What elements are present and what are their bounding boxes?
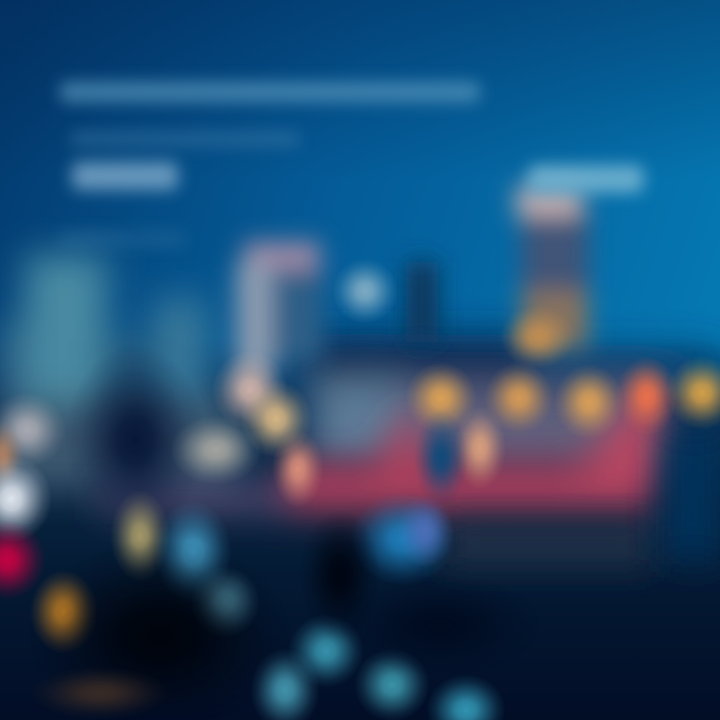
blurred skyline buildings (0, 255, 720, 490)
bokeh: teal 4 (429, 677, 503, 720)
lower dark area (0, 340, 720, 720)
bokeh: amber 4 (669, 358, 720, 428)
foreground shadow: right (386, 594, 493, 648)
tower base glow (502, 310, 572, 366)
bokeh: amber 1 (408, 364, 474, 429)
bokeh: amber 3 (556, 366, 620, 436)
bokeh: orange lower left (32, 572, 95, 651)
warm glow: grey building (174, 418, 258, 482)
tall right tower (516, 186, 588, 348)
bokeh: red left edge (0, 524, 44, 598)
bokeh: teal 1 (291, 618, 361, 685)
dark building shadow at left (76, 358, 193, 510)
bokeh: blue reflection (356, 496, 451, 582)
warm glow: yellow building (242, 382, 310, 456)
bokeh: grey teal (197, 570, 256, 632)
warm glow: bridge end (274, 433, 321, 504)
blue gap in bridge (416, 413, 466, 502)
bokeh: white left edge (0, 458, 50, 539)
dark tower (406, 262, 438, 342)
foreground shadow: left (46, 548, 256, 702)
bokeh: orange (618, 358, 676, 432)
label block (illegible text) (72, 162, 178, 190)
red bridge band (100, 395, 660, 512)
bokeh: grey left (0, 396, 62, 464)
dim brown light (45, 672, 155, 714)
title bar (illegible text) (60, 82, 480, 102)
small pale building (335, 261, 395, 321)
bokeh: teal 3 (357, 652, 427, 719)
foreground shadow: centre (310, 523, 373, 632)
centre tower with pink crown (236, 242, 322, 377)
bokeh: brown left edge (0, 424, 22, 484)
bokeh: amber 2 (487, 364, 551, 430)
bokeh: peach (458, 410, 504, 486)
bokeh: sky blue (158, 506, 229, 596)
bokeh: olive (112, 494, 168, 577)
dark reflection under the bridge (440, 525, 655, 565)
right dark water edge (665, 430, 720, 560)
subtitle bar (illegible text) (70, 132, 300, 146)
faint caption bar (illegible text) (60, 232, 186, 246)
bokeh: violet reflection (403, 498, 451, 564)
right tower crown label (illegible text) (528, 165, 644, 193)
bokeh: teal 2 (253, 652, 317, 720)
warm glow: building (214, 354, 286, 427)
